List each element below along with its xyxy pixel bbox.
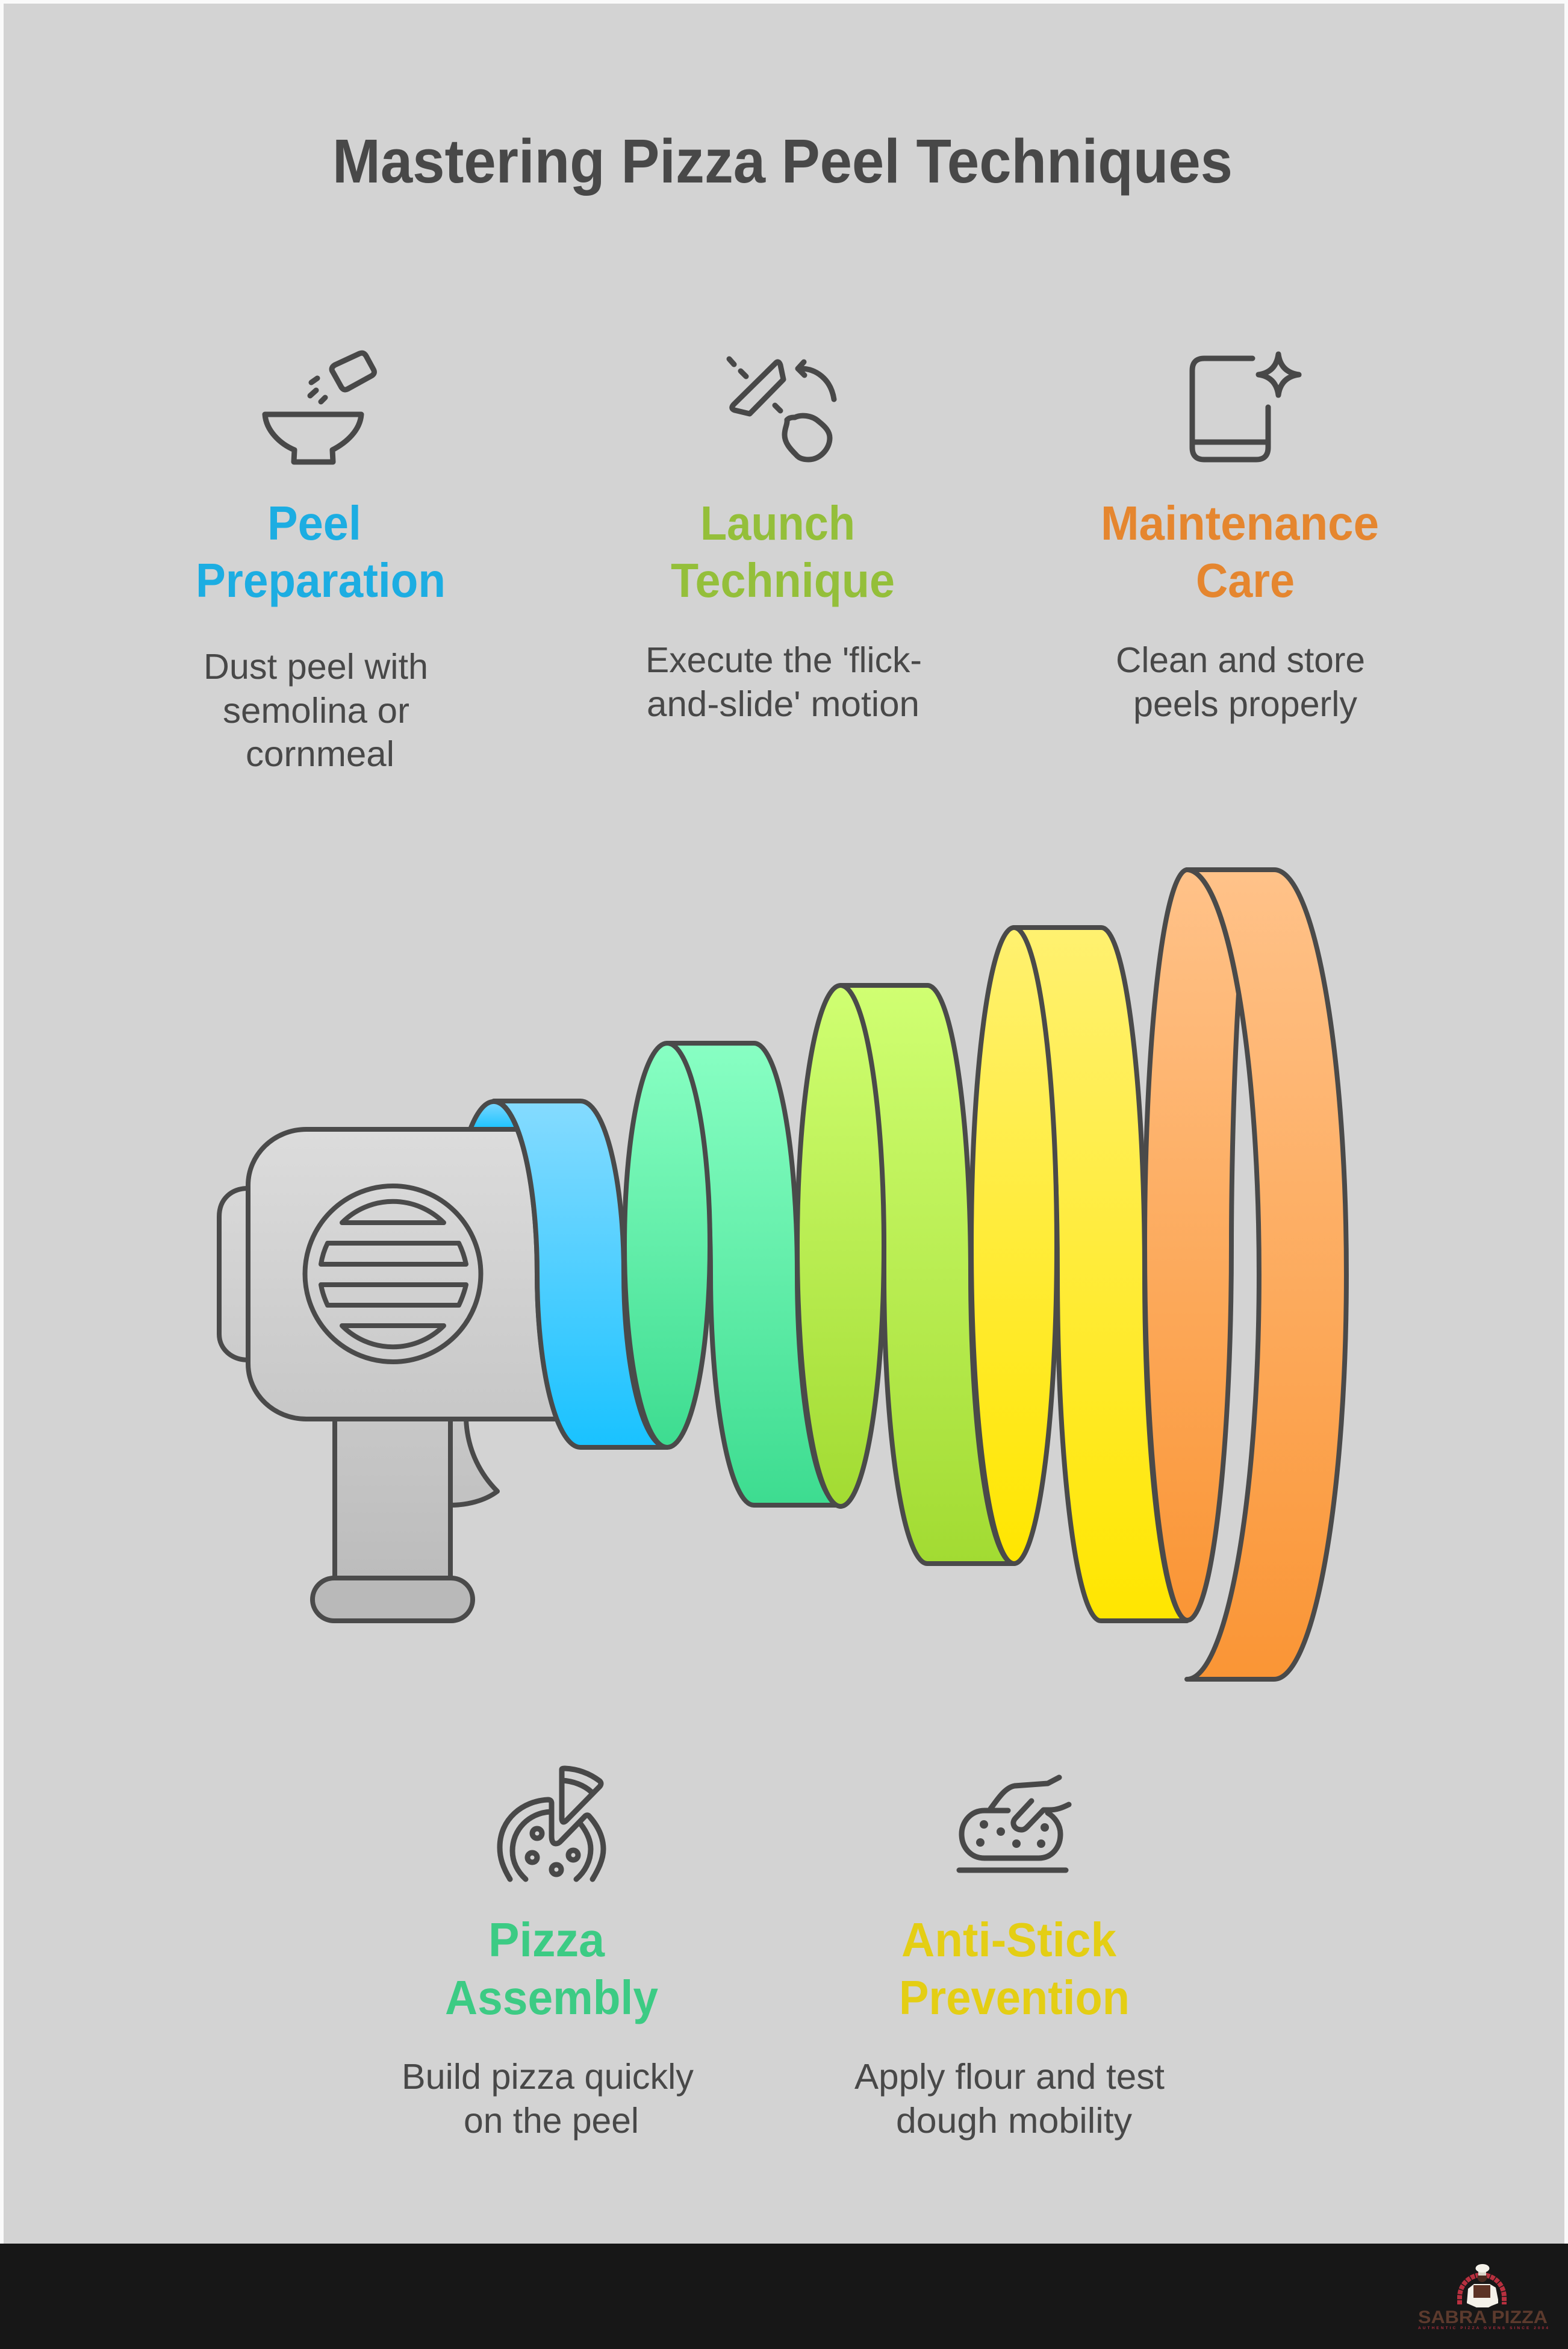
text: Maintenance Care description: Clean and store bbox=[1116, 640, 1365, 680]
text: Launch Technique description bbox=[646, 640, 922, 724]
green ring ellipse bbox=[624, 1043, 710, 1447]
heading: Launch Technique: Technique bbox=[671, 554, 895, 607]
heading: Pizza Assembly: Assembly bbox=[445, 1971, 658, 2024]
heading: Anti-Stick Prevention: Anti-Stick bbox=[901, 1913, 1116, 1967]
logo brick arch bbox=[1460, 2275, 1504, 2304]
gun body bbox=[248, 1129, 557, 1419]
heading: Maintenance Care: Maintenance bbox=[1101, 496, 1379, 550]
heading: Peel Preparation bbox=[196, 496, 446, 607]
text: Pizza Assembly description bbox=[402, 2057, 694, 2141]
heading: Maintenance Care: Care bbox=[1196, 554, 1295, 607]
blue ring band bbox=[494, 1101, 667, 1447]
section: Maintenance Care bbox=[1101, 354, 1379, 724]
illustration: pizza gun firing rings bbox=[219, 870, 1346, 1679]
heading: Maintenance Care bbox=[1101, 496, 1379, 607]
text: Peel Preparation description: semolina or bbox=[223, 691, 409, 731]
section: Peel Preparation bbox=[196, 353, 446, 774]
text: Maintenance Care description bbox=[1116, 640, 1365, 724]
text: Maintenance Care description: peels properly bbox=[1133, 684, 1358, 724]
text: Peel Preparation description bbox=[204, 647, 428, 774]
heading: Launch Technique: Launch bbox=[700, 496, 855, 550]
heading: Peel Preparation: Preparation bbox=[196, 554, 446, 607]
title: Mastering Pizza Peel Techniques bbox=[332, 126, 1233, 196]
text: Anti-Stick Prevention description: Apply flour and test bbox=[854, 2057, 1165, 2097]
logo tagline: AUTHENTIC PIZZA OVENS SINCE 2004 bbox=[1418, 2326, 1548, 2330]
text: Pizza Assembly description: Build pizza quickly bbox=[402, 2057, 694, 2097]
heading: Anti-Stick Prevention: Prevention bbox=[899, 1971, 1130, 2024]
logo: Sabra Pizza bbox=[1418, 2264, 1548, 2330]
section: Pizza Assembly bbox=[402, 1768, 694, 2141]
gun grill bbox=[305, 1186, 481, 1362]
icon: peel flicking dough bbox=[729, 359, 834, 460]
text: Peel Preparation description: cornmeal bbox=[246, 734, 394, 774]
heading: Launch Technique bbox=[671, 496, 895, 607]
gun trigger bbox=[450, 1419, 497, 1505]
orange ring front face bbox=[1145, 870, 1239, 1620]
section: Anti-Stick Prevention bbox=[854, 1777, 1165, 2141]
green ring band bbox=[667, 1043, 841, 1505]
yellow ring band bbox=[1014, 928, 1187, 1621]
logo chef bbox=[1467, 2264, 1498, 2307]
text: Anti-Stick Prevention description: dough mobility bbox=[896, 2101, 1133, 2141]
text: Anti-Stick Prevention description bbox=[854, 2057, 1165, 2141]
logo wordmark: SABRA PIZZA bbox=[1418, 2307, 1548, 2327]
gun rear nub bbox=[219, 1188, 248, 1360]
footer bar bbox=[0, 2244, 1568, 2349]
icon: flour shaker over bowl bbox=[265, 353, 374, 462]
gun handle bbox=[335, 1415, 450, 1579]
heading: Anti-Stick Prevention bbox=[899, 1913, 1130, 2024]
icon: clean peel with sparkle bbox=[1192, 354, 1299, 460]
text: Pizza Assembly description: on the peel bbox=[464, 2101, 639, 2141]
text: Launch Technique description: and-slide' motion bbox=[647, 684, 919, 724]
section: Launch Technique bbox=[646, 359, 922, 724]
lime ring ellipse bbox=[797, 985, 884, 1506]
heading: Pizza Assembly: Pizza bbox=[488, 1913, 605, 1967]
icon: hand pressing dough bbox=[959, 1777, 1069, 1870]
heading: Pizza Assembly bbox=[445, 1913, 658, 2024]
orange ring band bbox=[1187, 870, 1346, 1679]
blue ring back sliver bbox=[469, 1102, 518, 1132]
gun handle foot bbox=[313, 1578, 473, 1621]
lime ring band bbox=[841, 985, 1014, 1564]
text: Peel Preparation description: Dust peel with bbox=[204, 647, 428, 687]
yellow ring ellipse bbox=[971, 928, 1057, 1564]
heading: Peel Preparation: Peel bbox=[267, 496, 361, 550]
icon: pizza with slice bbox=[500, 1768, 603, 1879]
text: Launch Technique description: Execute the 'flick- bbox=[646, 640, 922, 680]
